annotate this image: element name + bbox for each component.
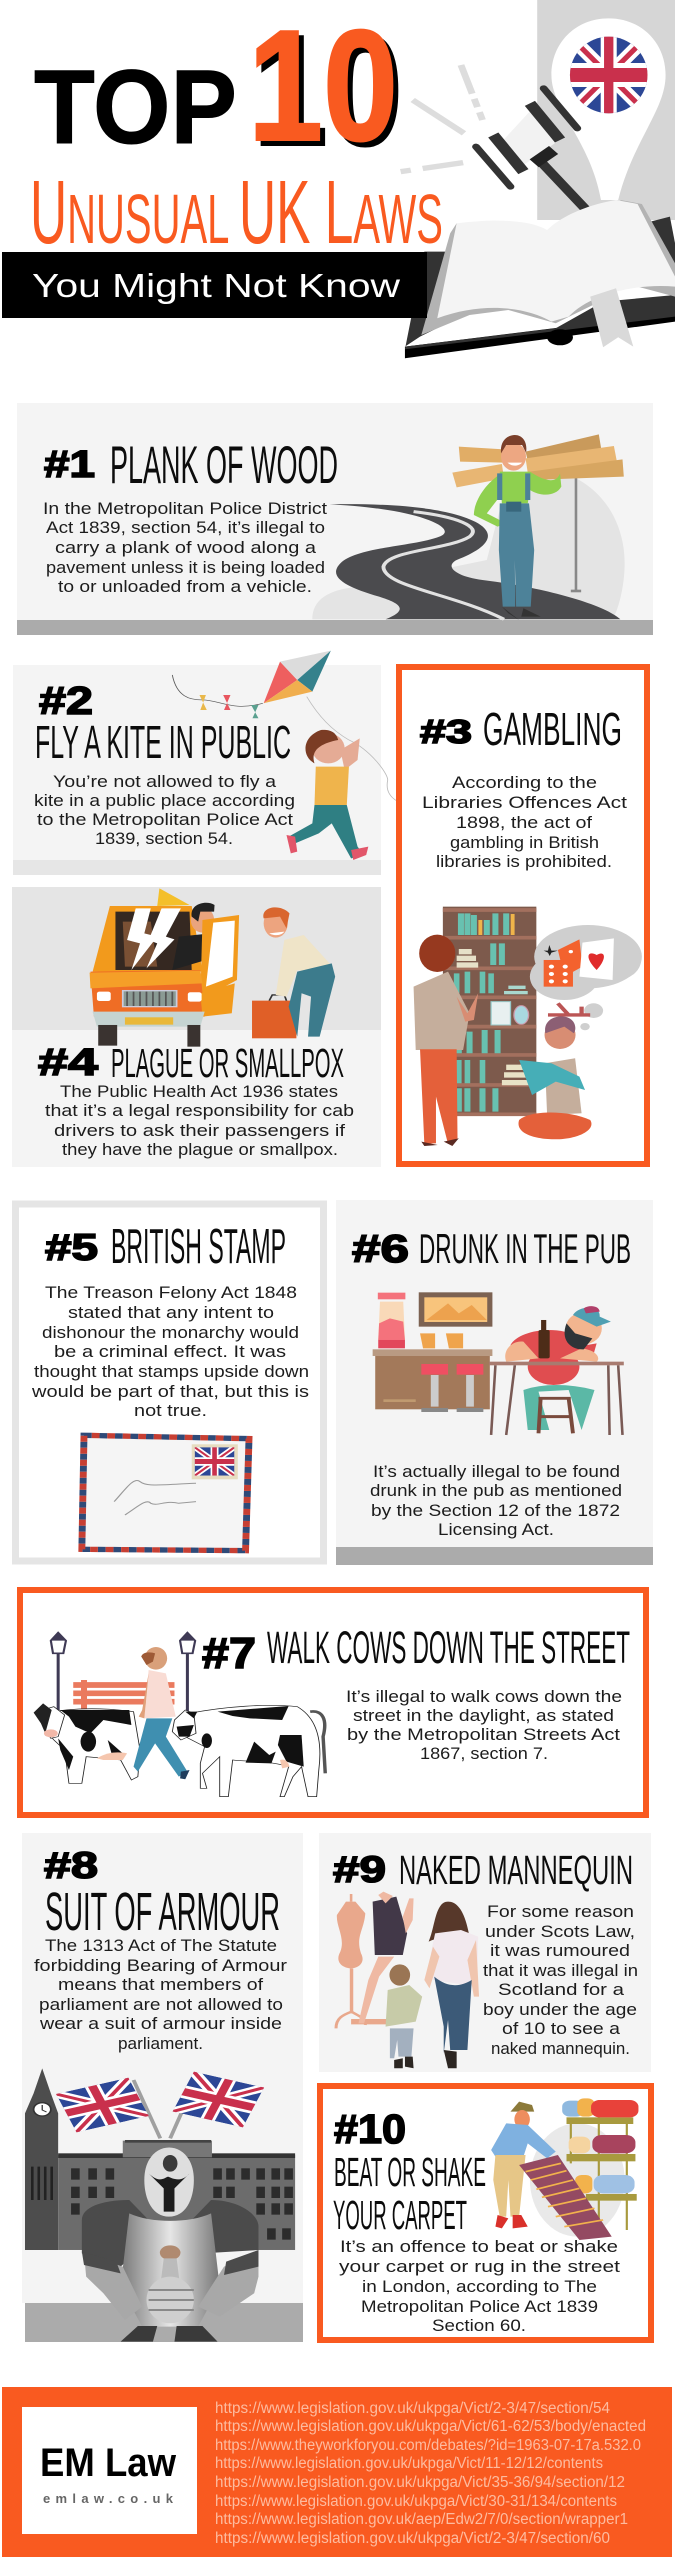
body text: street in the daylight, as stated [353,1707,614,1725]
body text: 1839, section 54. [95,830,233,848]
panel: #5 british stamp [16,1204,324,1561]
body text: by the Section 12 of the 1872 [371,1502,620,1520]
heading: #3 [420,713,472,750]
heading: PLANK OF WOOD [110,436,338,495]
body text: that it’s a legal responsibility for cab [45,1102,354,1120]
body text: of 10 to see a [502,2020,621,2038]
body text: In the Metropolitan Police District [43,500,327,518]
heading [45,1220,286,1274]
body text: by the Metropolitan Streets Act [347,1726,621,1744]
body text [31,1284,309,1420]
source links: https://www.theyworkforyou.com/debates/?id=1963-07-17a.532.0 [215,2437,641,2454]
heading: SUIT OF ARMOUR [45,1882,280,1942]
body text: not true. [134,1402,207,1420]
panel: #1 plank of wood [17,403,653,635]
body text: libraries is prohibited. [436,853,612,871]
heading: FLY A KITE IN PUBLIC [35,716,291,768]
body text: According to the [452,774,597,792]
source links: https://www.legislation.gov.uk/ukpga/Vict/35-36/94/section/12 [215,2474,625,2491]
heading: #1 [44,444,95,486]
illustration: woman beating carpet at textile stall [491,2098,638,2240]
heading [333,2106,486,2238]
body text: Metropolitan Police Act 1839 [361,2298,598,2316]
title: 10: 10 [253,3,403,179]
panel: #4 plague or smallpox: PLAGUE OR SMALLPOX [111,1040,344,1086]
body text: 1898, the act of [456,814,592,832]
logo: EM Law [22,2407,197,2534]
body text: drivers to ask their passengers if [54,1122,345,1140]
heading: #10 [334,2106,406,2152]
title: 10: 10 [248,0,398,174]
heading: #7 [202,1629,256,1678]
body text: drunk in the pub as mentioned [370,1482,622,1500]
body text: wear a suit of armour inside [39,2015,282,2033]
panel: #9 naked mannequin [319,1833,651,2072]
body text: be a criminal effect. It was [54,1343,286,1361]
body text: means that members of [58,1976,263,1994]
panel: #8 suit of armour [22,1833,303,2342]
body text: Licensing Act. [438,1521,554,1539]
source links: https://www.legislation.gov.uk/aep/Edw2/7/0/section/wrapper1 [215,2511,628,2528]
subtitle bar [2,252,427,318]
heading [44,1845,280,1942]
logo: EM Law: EM Law [40,2441,177,2485]
body text: under Scots Law, [485,1923,635,1941]
body text [34,773,295,848]
body text: 1867, section 7. [420,1745,548,1763]
illustration: man walking cows past a bench [34,1633,325,1797]
heading [420,703,622,755]
body text: Section 60. [432,2317,526,2335]
body text: thought that stamps upside down [34,1363,309,1381]
body text [34,1937,288,2053]
body text [45,1083,354,1159]
illustration: airmail envelope with stamp [80,1433,251,1553]
body text: The Public Health Act 1936 states [60,1083,338,1101]
source links [215,2400,646,2547]
body text: pavement unless it is being loaded [46,559,325,577]
panel: #2 fly a kite in public [13,651,396,875]
panel: #6 drunk in the pub [336,1200,653,1565]
header illustration: gavel, book and flag pin [401,0,675,358]
heading: #5 [45,1227,98,1268]
body text: forbidding Bearing of Armour [34,1957,288,1975]
body text: dishonour the monarchy would [42,1324,299,1342]
illustration: library, reader and gambling thought [414,907,642,1146]
footer [2,2387,672,2557]
body text: carry a plank of wood along a [55,539,317,557]
heading [35,680,291,768]
body text: would be part of that, but this is [31,1383,309,1401]
body text: naked mannequin. [491,2040,630,2058]
panel: #10 beat or shake your carpet [320,2086,651,2340]
illustration: drunk man at bar table [373,1292,624,1435]
body text: The 1313 Act of The Statute [45,1937,277,1955]
title: Unusual UK Laws: UNUSUAL UK LAWS [30,163,443,263]
body text [346,1688,622,1763]
illustration: kite [172,651,396,801]
source links: https://www.legislation.gov.uk/ukpga/Vict/11-12/12/contents [215,2455,603,2472]
heading [38,1040,344,1086]
body text: kite in a public place according [34,792,295,810]
source links: https://www.legislation.gov.uk/ukpga/Vict/2-3/47/section/54 [215,2400,610,2417]
panel: #10 beat or shake your carpet: BEAT OR SHAKE [334,2149,486,2195]
body text: Libraries Offences Act [422,794,628,812]
illustration: parliament, flags and knight [25,2068,295,2342]
body text: gambling in British [450,834,599,852]
body text: You’re not allowed to fly a [53,773,277,791]
body text: For some reason [487,1903,634,1921]
body text: Scotland for a [498,1981,625,1999]
illustration: taxi and passenger [90,888,335,1047]
heading: #8 [44,1845,98,1886]
source links: https://www.legislation.gov.uk/ukpga/Vict/2-3/47/section/60 [215,2530,610,2547]
body text: parliament. [118,2035,203,2053]
heading [44,436,338,495]
panel: #4 plague or smallpox [12,887,381,1167]
title: TOP: TOP [34,49,237,166]
body text [43,500,327,596]
header [2,0,675,358]
body text [422,774,628,871]
heading: #9 [333,1849,386,1890]
body text: It’s actually illegal to be found [373,1463,620,1481]
body text: your carpet or rug in the street [339,2258,621,2276]
body text: boy under the age [483,2001,637,2019]
body text [339,2238,621,2335]
heading: YOUR CARPET [333,2192,467,2238]
subtitle bar: You Might Not Know [32,267,400,304]
body text: in London, according to The [362,2278,597,2296]
body text: Act 1839, section 54, it’s illegal to [46,519,325,537]
body text [483,1903,638,2058]
body text: The Treason Felony Act 1848 [45,1284,297,1302]
body text: stated that any intent to [68,1304,274,1322]
panel: #3 gambling [399,667,647,1164]
illustration: man carrying planks on a road [312,434,625,620]
heading: #6 [352,1228,409,1271]
body text: to or unloaded from a vehicle. [58,578,312,596]
panel: #5 british stamp: BRITISH STAMP [111,1220,286,1274]
heading [352,1225,631,1272]
body text [370,1463,622,1539]
logo: EM Law: emlaw.co.uk [43,2491,174,2506]
source links: https://www.legislation.gov.uk/ukpga/Vict/61-62/53/body/enacted [215,2418,646,2435]
body text: they have the plague or smallpox. [62,1141,338,1159]
panel: #7 walk cows down the street [20,1590,646,1815]
illustration: woman and boy looking at mannequins [336,1892,479,2068]
body text: it was rumoured [490,1942,630,1960]
heading: #4 [38,1042,98,1084]
body text: that it was illegal in [483,1962,638,1980]
heading [333,1847,633,1893]
source links: https://www.legislation.gov.uk/ukpga/Vict/30-31/134/contents [215,2493,617,2510]
body text: It’s illegal to walk cows down the [346,1688,622,1706]
heading: #2 [39,680,93,723]
body text: It’s an offence to beat or shake [340,2238,618,2256]
body text: parliament are not allowed to [39,1996,283,2014]
illustration: child flying kite [286,730,368,860]
body text: to the Metropolitan Police Act [37,811,293,829]
